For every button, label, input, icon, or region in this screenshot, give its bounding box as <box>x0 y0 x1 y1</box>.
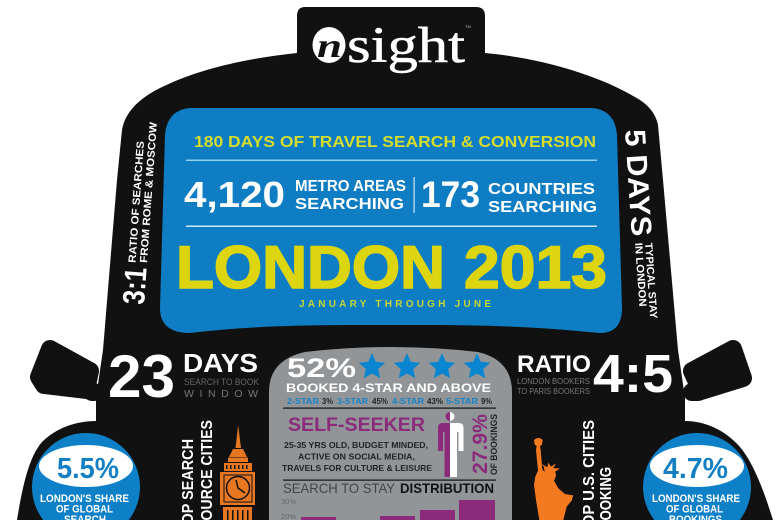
stat: 23 days window: DAYS <box>183 348 258 378</box>
bar chart: search to stay <box>281 497 495 520</box>
stat: 3:1 ratio: RATIO OF SEARCHES <box>127 141 147 263</box>
text block: persona description <box>282 440 432 473</box>
stat: 4,120 metro areas: 4,120 <box>184 174 285 215</box>
star rating breakdown: 3-STAR <box>337 396 368 406</box>
left mirror <box>39 349 94 392</box>
stat: ratio 4:5 <box>517 344 673 404</box>
stat: 173 countries <box>421 174 597 216</box>
stat: 52% four stars: BOOKED 4-STAR AND ABOVE <box>286 381 491 395</box>
panel: right headlight share of bookings: LONDON'S SHARE <box>652 493 740 505</box>
stat: 23 days window: 23 <box>108 343 175 410</box>
stat: 23 days window <box>108 343 259 410</box>
heading: top US cities booking <box>581 420 615 520</box>
right mirror <box>692 349 743 392</box>
panel: windshield <box>160 108 622 333</box>
text block: persona description: ACTIVE ON SOCIAL MEDIA, <box>298 452 415 462</box>
panel: right headlight share of bookings <box>643 433 751 520</box>
subtitle: date range: JANUARY THROUGH JUNE <box>299 299 491 310</box>
icon: Big Ben <box>220 425 255 520</box>
stat: 52% four stars: 52% <box>287 353 356 383</box>
stat: 173 countries: 173 <box>421 174 480 215</box>
logo: nsight: n <box>317 28 342 65</box>
stat: 5 days stay: 5 DAYS <box>618 128 657 237</box>
star rating breakdown: 9% <box>481 396 492 406</box>
stat: 4,120 metro areas: SEARCHING <box>295 196 404 213</box>
star rating breakdown: 5-STAR <box>446 396 478 406</box>
heading: self-seeker: SELF-SEEKER <box>288 414 425 436</box>
title: London 2013: LONDON <box>176 234 445 301</box>
star rating breakdown <box>287 396 492 406</box>
stat: 23 days window: SEARCH TO BOOK <box>184 377 259 387</box>
stat: 52% four stars <box>286 353 491 395</box>
star rating breakdown: 3% <box>322 396 333 406</box>
stat: ratio 4:5: TO PARIS BOOKERS <box>517 386 590 396</box>
logo: nsight <box>312 18 471 74</box>
heading: top search source cities <box>180 420 216 520</box>
star rating breakdown: 2-STAR <box>287 396 319 406</box>
text block: persona description: 25-35 YRS OLD, BUDGET MINDED, <box>284 440 428 450</box>
panel: left headlight share of search: OF GLOBAL <box>56 504 113 516</box>
star rating breakdown: 43% <box>427 396 443 406</box>
icon: person half filled <box>438 412 464 477</box>
star rating breakdown: 4-STAR <box>392 396 424 406</box>
title: London 2013 <box>176 234 607 301</box>
logo: nsight: TM <box>465 24 471 29</box>
panel: right headlight share of bookings: OF GLOBAL <box>666 504 723 516</box>
stat: 5 days stay <box>618 128 659 319</box>
stat: 3:1 ratio: FROM ROME & MOSCOW <box>138 122 160 263</box>
stat: ratio 4:5: RATIO <box>517 351 591 378</box>
panel: left headlight share of search: 5.5% <box>57 453 119 485</box>
panel: right headlight share of bookings: 4.7% <box>663 453 728 485</box>
stat: ratio 4:5: LONDON BOOKERS <box>517 376 590 386</box>
stat: 23 days window: WINDOW <box>184 388 258 400</box>
stat: 3:1 ratio: 3:1 <box>116 266 154 305</box>
stat: 4,120 metro areas: METRO AREAS <box>295 178 406 195</box>
stat: 173 countries: COUNTRIES <box>488 181 595 198</box>
star rating breakdown: 45% <box>372 396 388 406</box>
stat: 4,120 metro areas <box>184 174 406 215</box>
panel: left headlight share of search: LONDON'S SHARE <box>40 493 129 505</box>
stat: 3:1 ratio <box>116 122 160 305</box>
stat: 173 countries: SEARCHING <box>488 199 597 216</box>
heading: search to stay distribution: DISTRIBUTION <box>400 480 494 496</box>
panel: left headlight share of search <box>32 433 140 520</box>
stat: 5 days stay: IN LONDON <box>632 242 648 307</box>
stat: 5 days stay: TYPICAL STAY <box>642 242 659 319</box>
heading: search to stay distribution <box>283 480 494 496</box>
stat: 27.9% of bookings: 27.9% <box>469 414 492 474</box>
heading: search to stay distribution: SEARCH TO STAY <box>283 480 396 496</box>
bar chart: search to stay: 30% <box>281 497 296 506</box>
stat: ratio 4:5: 4:5 <box>593 344 673 404</box>
icon: Statue of Liberty <box>534 438 573 520</box>
logo: nsight: sight <box>347 18 465 74</box>
stat: 27.9% of bookings: OF BOOKINGS <box>489 414 499 475</box>
panel: grille <box>269 347 512 520</box>
title: London 2013: 2013 <box>464 234 607 301</box>
text block: persona description: TRAVELS FOR CULTURE & LEISURE <box>282 463 432 473</box>
heading: 180 days: 180 DAYS OF TRAVEL SEARCH & CONVERSION <box>194 134 596 151</box>
